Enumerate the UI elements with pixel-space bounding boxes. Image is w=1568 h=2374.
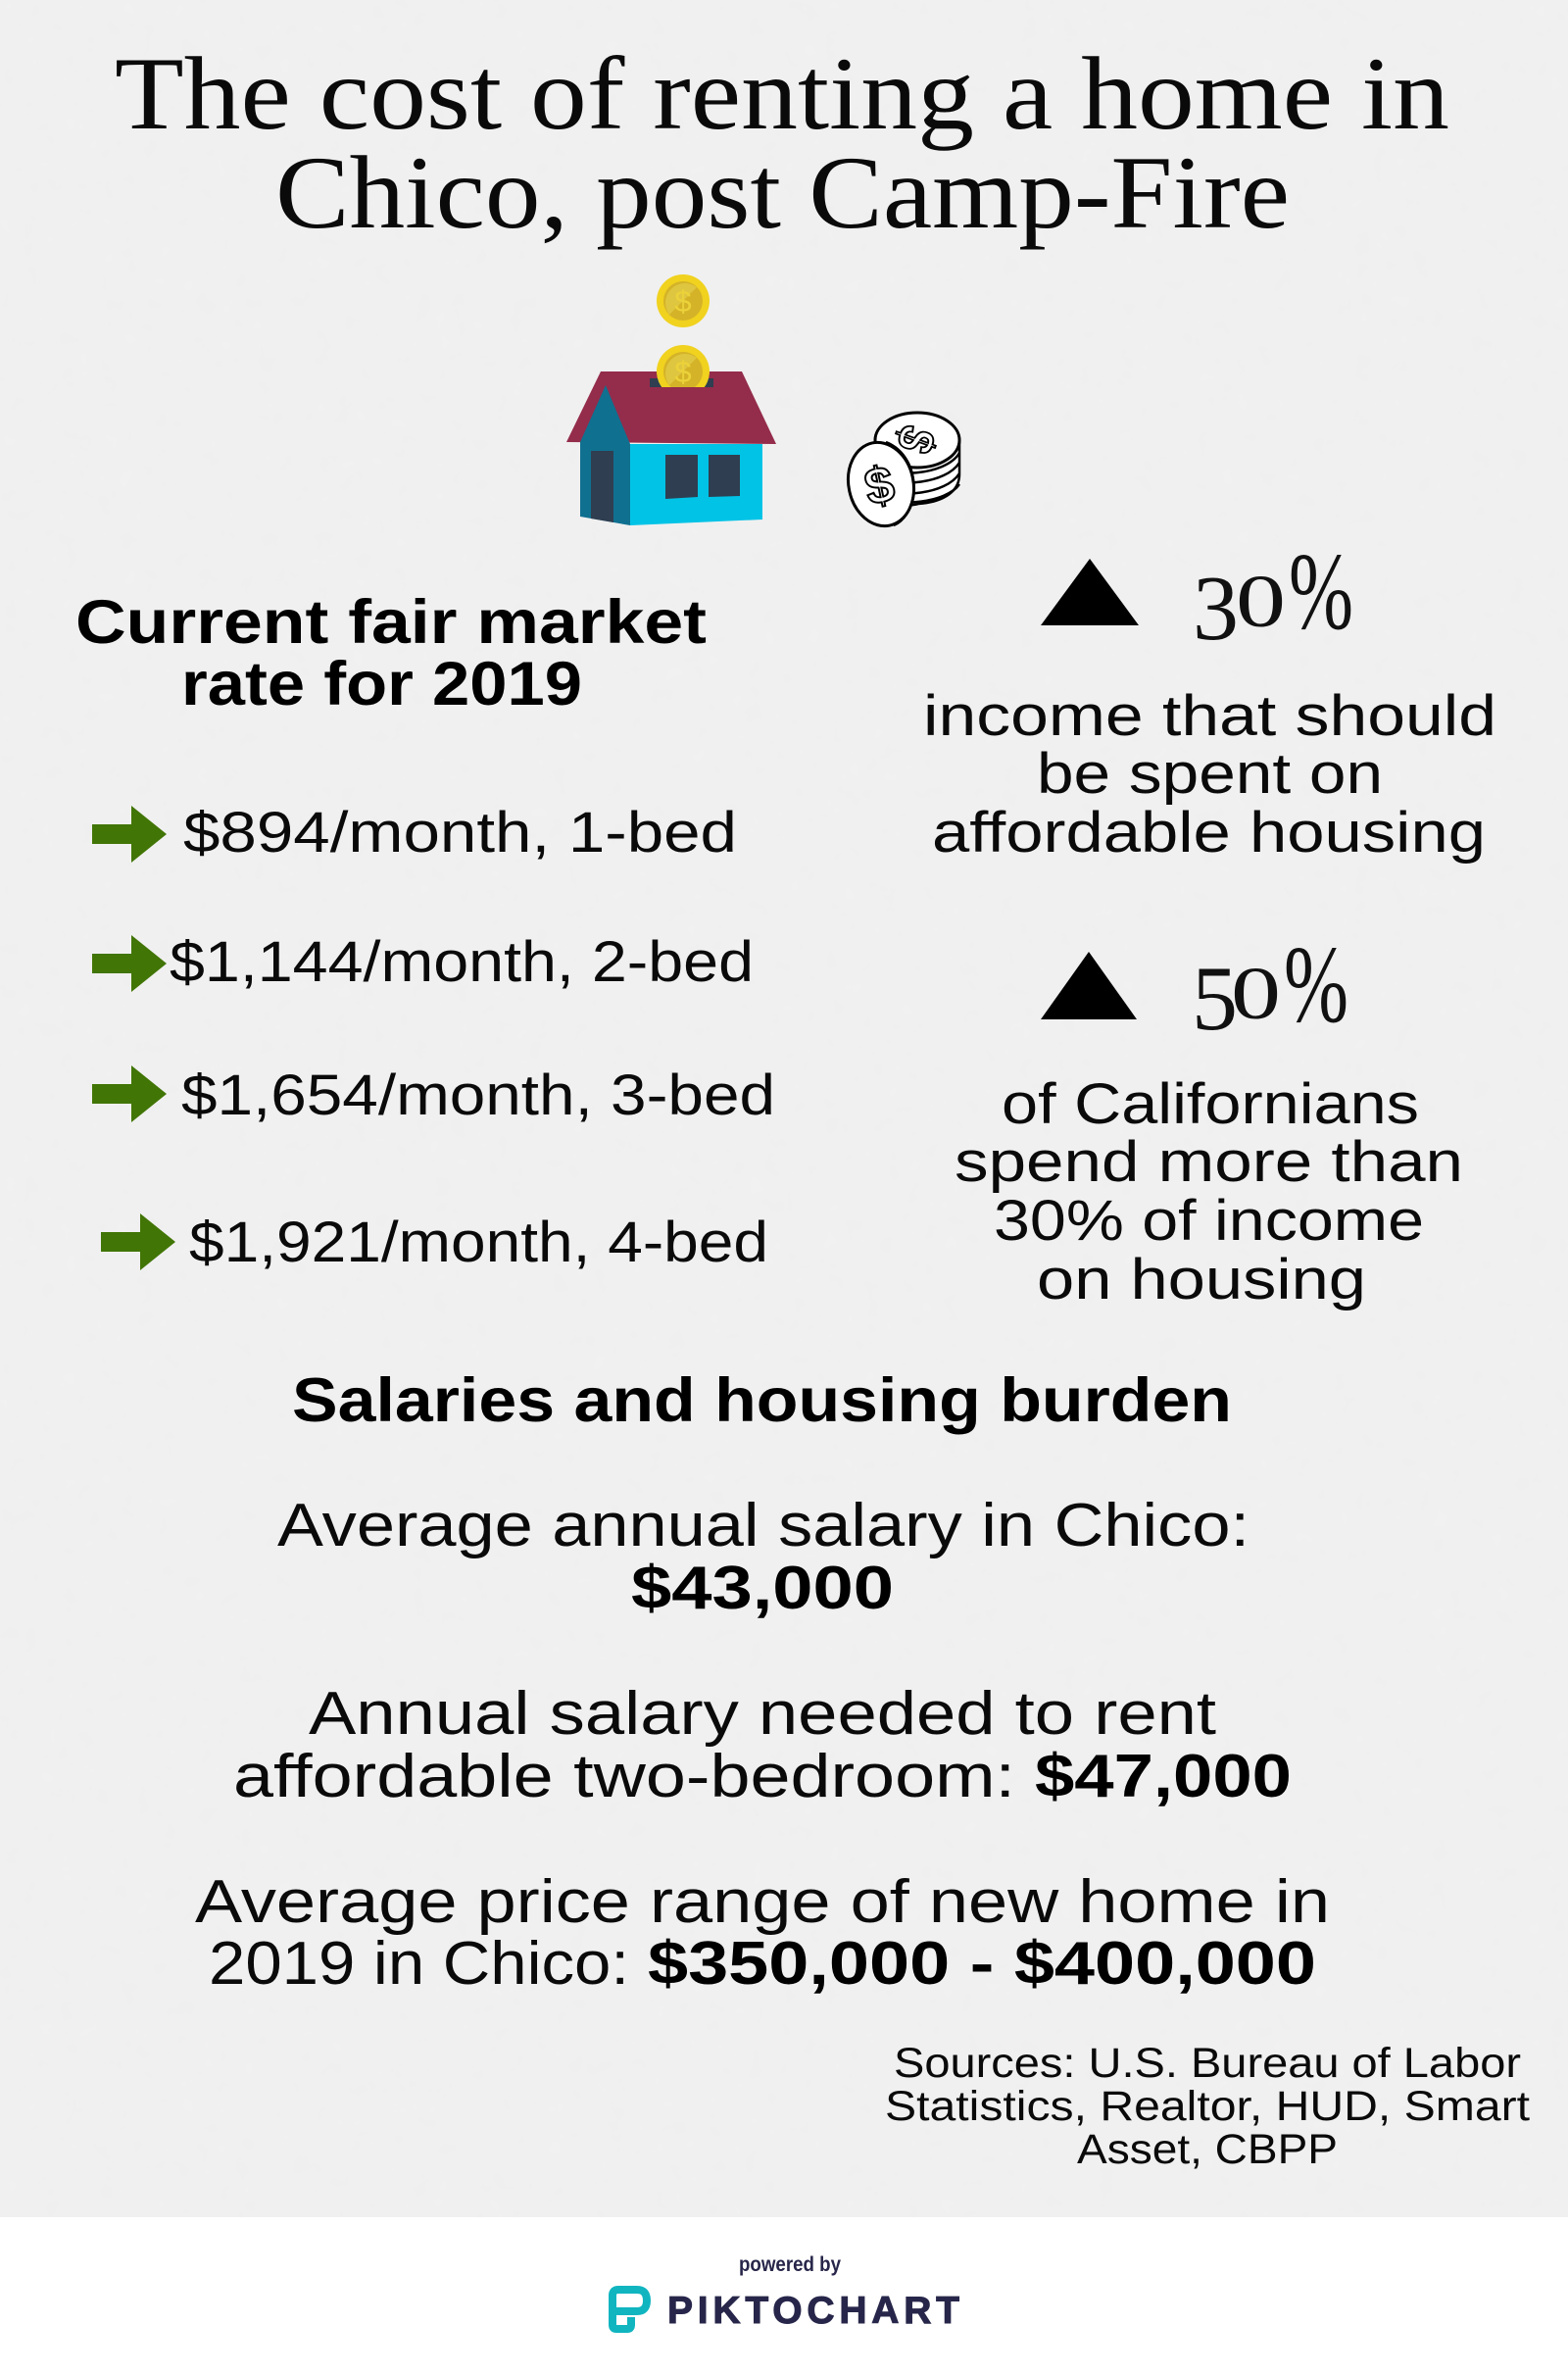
text: Californians share: 30% of income: [994, 1189, 1424, 1253]
text: salary needed: $47,000: [1035, 1743, 1292, 1810]
figure: 30%: %: [1289, 531, 1353, 653]
icon: house piggy bank with falling coins: $: [674, 284, 692, 319]
text: salary needed: Annual salary needed to rent: [309, 1680, 1216, 1748]
text: income share: income that should: [923, 684, 1496, 748]
text: sources: [885, 2040, 1530, 2173]
text: salary needed: [233, 1680, 1292, 1810]
icon: stack of dollar coins: $: [885, 419, 947, 461]
text: income share: [923, 684, 1496, 865]
wordmark: PIKTOCHART: [667, 2290, 959, 2332]
heading: current fair market rate: Current fair market: [75, 588, 707, 657]
text: average salary: Average annual salary in Chico:: [277, 1492, 1250, 1559]
text: salary needed: affordable two-bedroom:: [233, 1743, 1015, 1810]
text: Californians share: of Californians: [1002, 1072, 1419, 1136]
text: average salary: [277, 1492, 1250, 1622]
heading: current fair market rate: [75, 588, 707, 718]
figure: 50%: 0: [1231, 953, 1281, 1035]
text: sources: Statistics, Realtor, HUD, Smart: [885, 2083, 1530, 2130]
footer: piktochart branding: powered by: [739, 2253, 841, 2276]
icon: up triangle: [1041, 559, 1139, 625]
text: sources: Asset, CBPP: [1077, 2126, 1338, 2173]
list: monthly rents with arrows: [92, 801, 775, 1274]
text: average salary: $43,000: [631, 1555, 894, 1622]
title: Chico, post Camp-Fire: [275, 135, 1290, 250]
text: new home price: $350,000 - $400,000: [648, 1930, 1316, 1998]
text: income share: affordable housing: [932, 801, 1486, 865]
icon: piktochart logo: [612, 2290, 647, 2329]
icon: stack of dollar coins: $: [859, 456, 900, 517]
text: new home price: [195, 1868, 1330, 1998]
title: [115, 36, 1449, 250]
figure: 30%: 3: [1193, 558, 1239, 660]
title: The cost of renting a home in: [115, 36, 1449, 151]
figure: 30%: 0: [1236, 561, 1286, 643]
text: new home price: Average price range of new home in: [195, 1868, 1330, 1936]
footer: piktochart branding: [0, 2217, 1568, 2374]
text: Californians share: on housing: [1037, 1248, 1366, 1311]
text: new home price: 2019 in Chico:: [209, 1930, 629, 1998]
rent row: 2-bed: $1,144/month, 2-bed: [170, 930, 754, 994]
icon: stack of dollar coins: [841, 413, 959, 532]
figure: 50%: 5: [1192, 948, 1238, 1050]
icon: house piggy bank with falling coins: [566, 274, 776, 525]
text: income share: be spent on: [1037, 742, 1383, 806]
rent row: 3-bed: $1,654/month, 3-bed: [181, 1063, 775, 1127]
figure: 50%: %: [1284, 924, 1348, 1046]
icon: house piggy bank with falling coins: $: [674, 355, 692, 389]
rent row: 1-bed: $894/month, 1-bed: [183, 801, 737, 865]
text: Californians share: [955, 1072, 1463, 1311]
text: Californians share: spend more than: [955, 1130, 1463, 1194]
stat: 50 percent: [955, 924, 1463, 1311]
stat: 30 percent: [923, 531, 1496, 865]
heading: salaries and housing burden: Salaries and housing burden: [292, 1366, 1232, 1435]
icon: up triangle: [1041, 952, 1137, 1019]
text: sources: Sources: U.S. Bureau of Labor: [894, 2040, 1521, 2087]
rent row: 4-bed: $1,921/month, 4-bed: [189, 1211, 768, 1274]
heading: current fair market rate: rate for 2019: [181, 650, 582, 718]
